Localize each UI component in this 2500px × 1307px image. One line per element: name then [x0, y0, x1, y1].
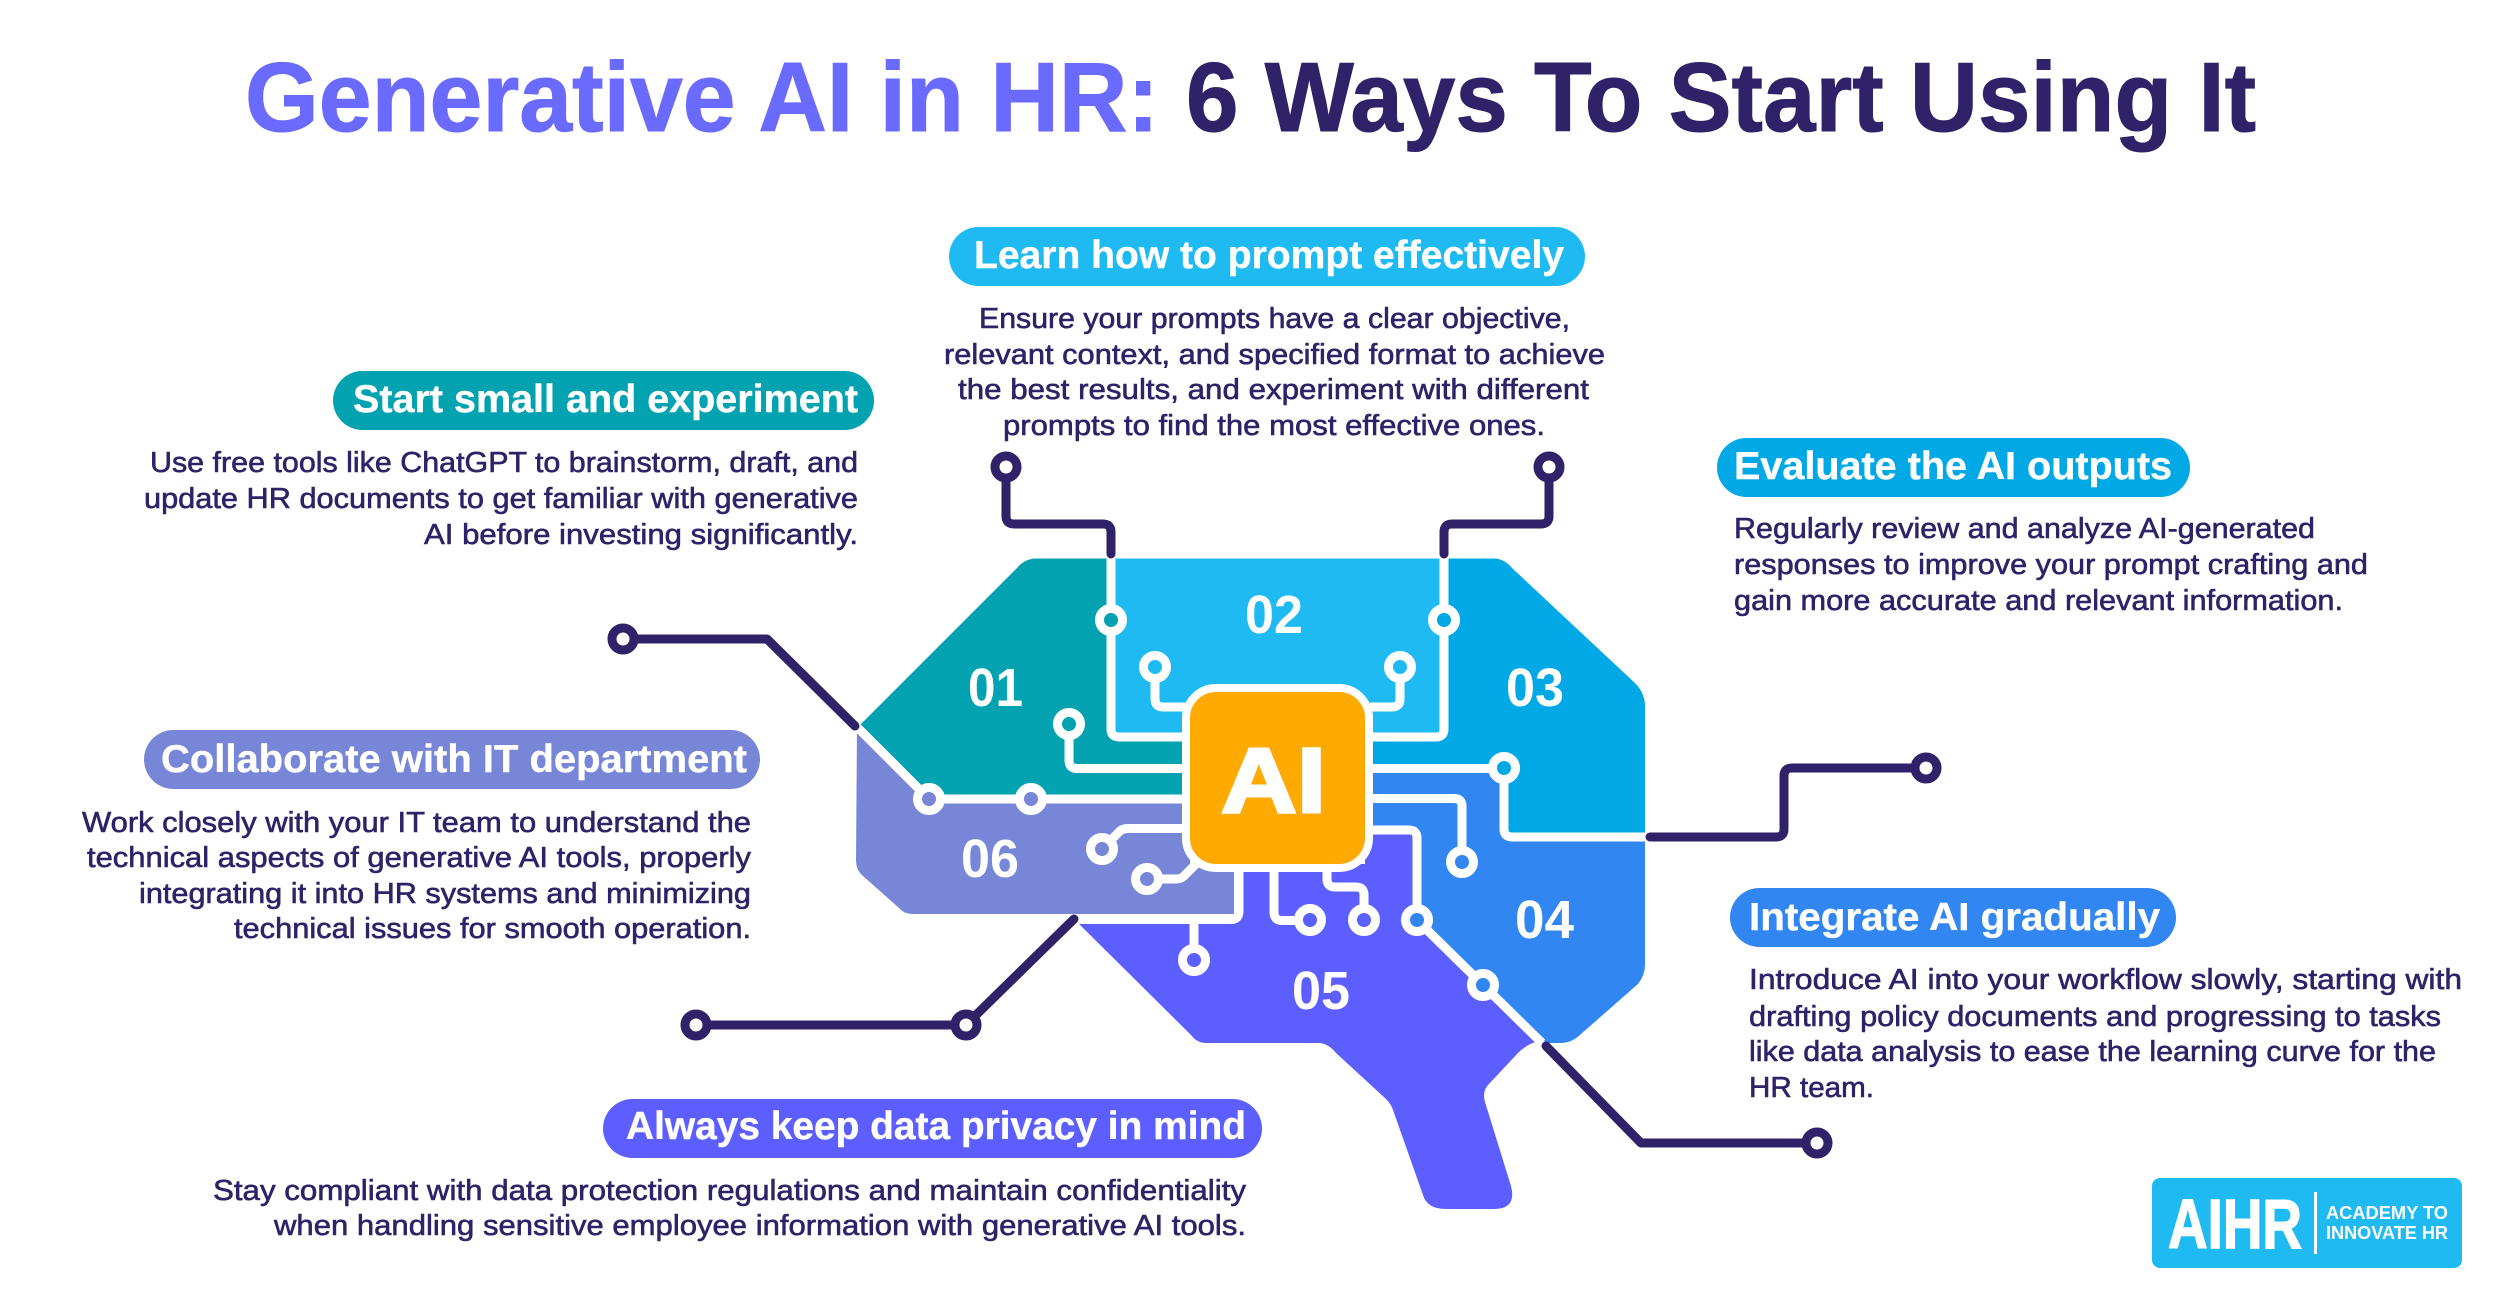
segment numbers: 05 — [1292, 961, 1350, 1021]
panel: 06 collaborate with IT department: Collaborate with IT department — [161, 738, 747, 781]
panel: 02 learn how to prompt effectively: relevant context, and specified format to achieve — [944, 339, 1605, 371]
panel: 05 always keep data privacy in mind — [213, 1099, 1262, 1242]
panel: 01 start small and experiment: update HR documents to get familiar with generative — [144, 483, 858, 515]
AI chip — [1186, 688, 1369, 868]
panel: 04 integrate AI gradually — [1730, 888, 2462, 1104]
connector: 05 lower left — [685, 919, 1074, 1036]
segment numbers: 03 — [1506, 658, 1564, 718]
panel: 06 collaborate with IT department — [82, 730, 760, 945]
brain diagram — [856, 558, 1645, 1209]
segment 06 — [856, 727, 1234, 914]
panel: 04 integrate AI gradually: Introduce AI into your workflow slowly, starting with — [1749, 964, 2462, 996]
connector lines — [612, 456, 1937, 1154]
logo: AIHR: ACADEMY TO — [2326, 1203, 2448, 1223]
segment numbers: 02 — [1245, 585, 1303, 645]
panel: 05 always keep data privacy in mind: when handling sensitive employee information with generative AI tools. — [273, 1210, 1246, 1242]
segment numbers: 01 — [968, 658, 1023, 718]
logo: AIHR — [2152, 1178, 2462, 1268]
connector: 06 left — [612, 628, 855, 726]
title — [245, 42, 2256, 152]
logo: AIHR: AIHR — [2168, 1185, 2302, 1263]
panel: 02 learn how to prompt effectively: the best results, and experiment with different — [958, 374, 1589, 406]
segment 03 — [1365, 558, 1645, 837]
segment numbers — [961, 585, 1574, 1021]
circuit nodes — [918, 608, 1516, 996]
panel: 04 integrate AI gradually: Integrate AI gradually — [1749, 896, 2160, 939]
AI chip: AI — [1221, 730, 1326, 832]
panel: 01 start small and experiment: Start small and experiment — [353, 378, 858, 421]
panel: 04 integrate AI gradually: like data analysis to ease the learning curve for the — [1749, 1036, 2436, 1068]
segment numbers: 04 — [1515, 890, 1574, 950]
logo: AIHR: INNOVATE HR — [2326, 1223, 2448, 1243]
connector: 03 right — [1650, 757, 1937, 837]
panel: 02 learn how to prompt effectively: Learn how to prompt effectively — [974, 234, 1564, 277]
connector: 01 top — [995, 456, 1111, 554]
panel: 06 collaborate with IT department: technical aspects of generative AI tools, properly — [87, 842, 752, 874]
title: Generative AI in HR: — [245, 42, 1159, 152]
panel: 05 always keep data privacy in mind: Always keep data privacy in mind — [626, 1105, 1246, 1148]
panel: 04 integrate AI gradually: drafting policy documents and progressing to tasks — [1749, 1001, 2441, 1033]
segment 01 — [860, 558, 1190, 799]
segment numbers: 06 — [961, 829, 1019, 889]
panel: 03 evaluate the AI outputs: Evaluate the AI outputs — [1734, 445, 2172, 488]
segment 05 — [1075, 830, 1540, 1209]
panel: 03 evaluate the AI outputs — [1717, 438, 2368, 617]
panel: 01 start small and experiment: AI before investing significantly. — [424, 519, 858, 551]
panel: 02 learn how to prompt effectively — [944, 227, 1605, 442]
segment 04 — [1365, 768, 1645, 1043]
panel: 06 collaborate with IT department: Work closely with your IT team to understand the — [82, 807, 751, 839]
connector: 03 top — [1444, 456, 1560, 554]
panel: 01 start small and experiment: Use free tools like ChatGPT to brainstorm, draft, and — [150, 447, 858, 479]
panel: 02 learn how to prompt effectively: Ensure your prompts have a clear objective, — [979, 303, 1570, 335]
panel: 03 evaluate the AI outputs: responses to improve your prompt crafting and — [1734, 549, 2368, 581]
panel: 03 evaluate the AI outputs: gain more accurate and relevant information. — [1734, 585, 2343, 617]
title: 6 Ways To Start Using It — [1186, 42, 2256, 152]
connector: 04 lower right — [1546, 1046, 1828, 1154]
segment 02 — [1111, 558, 1444, 737]
panel: 04 integrate AI gradually: HR team. — [1749, 1072, 1874, 1104]
panel: 01 start small and experiment — [144, 371, 874, 551]
white circuit traces — [857, 558, 1645, 1043]
panel: 06 collaborate with IT department: integrating it into HR systems and minimizing — [139, 878, 751, 910]
panel: 05 always keep data privacy in mind: Stay compliant with data protection regulations and maintain confidentiality — [213, 1175, 1247, 1207]
panel: 02 learn how to prompt effectively: prompts to find the most effective ones. — [1003, 410, 1545, 442]
panel: 03 evaluate the AI outputs: Regularly review and analyze AI-generated — [1734, 513, 2315, 545]
panel: 06 collaborate with IT department: technical issues for smooth operation. — [234, 913, 751, 945]
